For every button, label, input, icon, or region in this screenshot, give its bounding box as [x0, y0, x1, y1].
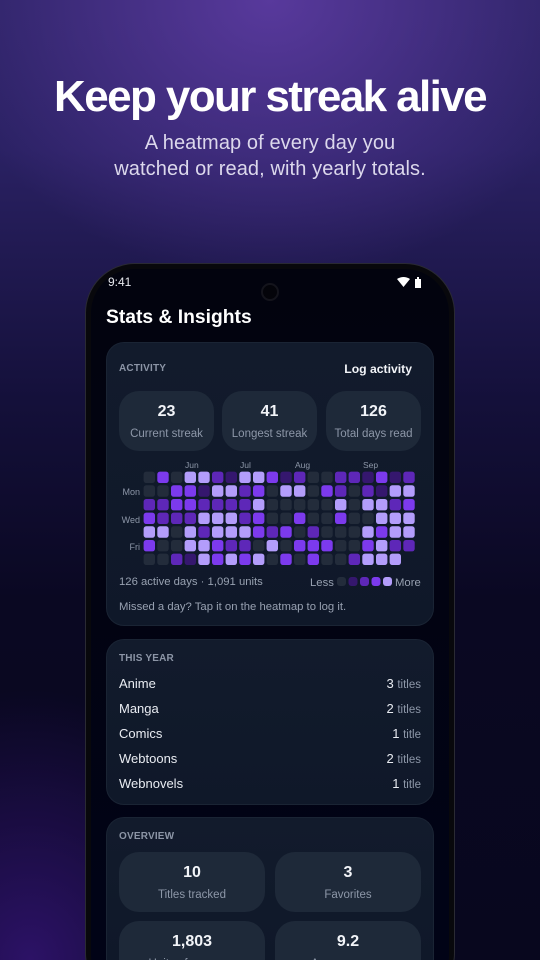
stat: titles tracked: Titles tracked	[158, 889, 226, 901]
stat: titles tracked	[119, 852, 265, 912]
stat: current streak: 23	[158, 403, 175, 420]
log activity button: Log activity	[344, 362, 412, 376]
value: anime: 3 titles	[386, 676, 421, 691]
value: manga: 2 titles	[386, 701, 421, 716]
value: webtoons: 2 titles	[386, 751, 421, 766]
heatmap legend	[310, 577, 421, 589]
heatmap chart: Jun	[185, 460, 199, 470]
heatmap chart: Sep	[363, 460, 378, 470]
stat: favorites: Favorites	[324, 889, 372, 901]
subtitle: watched or read, with yearly totals.	[114, 158, 426, 180]
stat: average score	[275, 921, 421, 960]
row: anime: Anime	[119, 676, 156, 691]
stat: total days read: 126	[360, 403, 387, 420]
row: webtoons: Webtoons	[119, 751, 177, 766]
stat: current streak	[119, 391, 214, 451]
title: Keep your streak alive	[54, 72, 486, 121]
screen heading: Stats & Insights	[106, 307, 252, 328]
stat: favorites: 3	[344, 864, 352, 881]
phone mockup	[85, 263, 455, 960]
stat: total days read	[326, 391, 421, 451]
panel: this year	[106, 639, 434, 805]
phone screen	[91, 269, 449, 960]
stat: average score: 9.2	[337, 933, 359, 950]
row: webnovels: Webnovels	[119, 776, 183, 791]
stat: longest streak: Longest streak	[232, 428, 307, 440]
status bar time: 9:41	[108, 275, 131, 289]
activity heading: ACTIVITY	[119, 363, 166, 374]
overview heading: OVERVIEW	[119, 831, 174, 842]
heatmap chart: Aug	[295, 460, 310, 470]
row: manga: Manga	[119, 701, 159, 716]
heatmap summary: 126 active days · 1,091 units	[119, 576, 263, 588]
stat: units of progress: 1,803	[172, 933, 212, 950]
subtitle	[114, 132, 426, 180]
panel: activity	[106, 342, 434, 626]
heatmap legend: More	[395, 577, 421, 589]
value: comics: 1 title	[392, 726, 421, 741]
stat: current streak: Current streak	[130, 428, 203, 440]
heatmap chart	[122, 460, 415, 565]
stat: favorites	[275, 852, 421, 912]
this year heading: THIS YEAR	[119, 653, 174, 664]
stat: titles tracked: 10	[183, 864, 201, 881]
status bar icons	[397, 277, 421, 288]
heatmap legend: Less	[310, 577, 334, 589]
heatmap chart: Jul	[240, 460, 251, 470]
row: comics: Comics	[119, 726, 162, 741]
icon: camera punch-hole	[261, 283, 279, 301]
stat: units of progress	[119, 921, 265, 960]
heatmap chart: Mon	[122, 487, 140, 497]
heatmap hint: Missed a day? Tap it on the heatmap to log it.	[119, 601, 346, 613]
stat: total days read: Total days read	[334, 428, 412, 440]
subtitle: A heatmap of every day you	[145, 132, 395, 154]
stat: longest streak: 41	[261, 403, 278, 420]
heatmap chart: Fri	[130, 542, 140, 552]
stat: longest streak	[222, 391, 317, 451]
panel: overview	[106, 817, 434, 960]
heatmap chart: Wed	[122, 515, 140, 525]
value: webnovels: 1 title	[392, 776, 421, 791]
